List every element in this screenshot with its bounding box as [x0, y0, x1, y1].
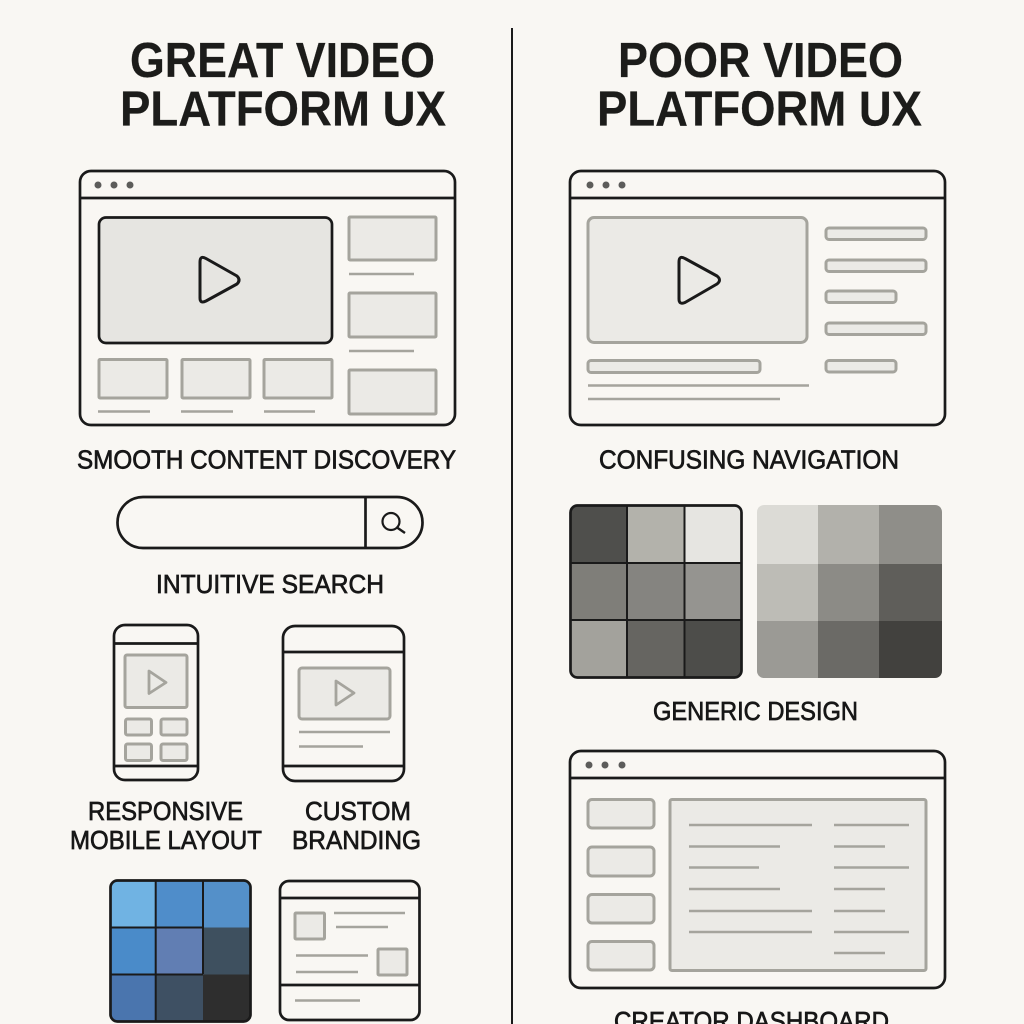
label: custom branding: CUSTOM — [305, 796, 411, 826]
title: great video platform UX — [120, 34, 446, 136]
title: poor video platform UX: POOR VIDEO — [618, 34, 903, 88]
icon: phone wireframe — [114, 625, 198, 780]
icon: document layout wireframe — [280, 881, 420, 1020]
title: great video platform UX: PLATFORM UX — [120, 82, 446, 136]
label: responsive mobile layout: RESPONSIVE — [88, 796, 243, 826]
icon: borderless grey grid — [757, 505, 942, 678]
icon: tablet wireframe — [283, 626, 404, 781]
icon: play button — [679, 257, 720, 303]
label: custom branding: BRANDING — [292, 825, 421, 855]
wireframe: smooth content discovery window — [80, 171, 455, 425]
label: smooth content discovery: SMOOTH CONTENT DISCOVERY — [77, 444, 456, 474]
label: responsive mobile layout — [70, 796, 262, 855]
icon: play button — [200, 257, 239, 302]
label: custom branding — [292, 796, 421, 855]
title: poor video platform UX: PLATFORM UX — [597, 82, 922, 136]
label: generic design: GENERIC DESIGN — [653, 696, 858, 726]
wireframe: confusing navigation window — [570, 171, 945, 425]
label: intuitive search: INTUITIVE SEARCH — [156, 569, 384, 599]
icon: search bar — [118, 497, 422, 548]
title: poor video platform UX — [597, 34, 922, 136]
label: confusing navigation: CONFUSING NAVIGATION — [599, 444, 899, 474]
title: great video platform UX: GREAT VIDEO — [130, 34, 435, 88]
icon: blue colour grid — [110, 880, 251, 1022]
label: responsive mobile layout: MOBILE LAYOUT — [70, 825, 262, 855]
icon: outlined grey grid — [570, 505, 742, 678]
wireframe: creator dashboard window — [570, 751, 945, 988]
